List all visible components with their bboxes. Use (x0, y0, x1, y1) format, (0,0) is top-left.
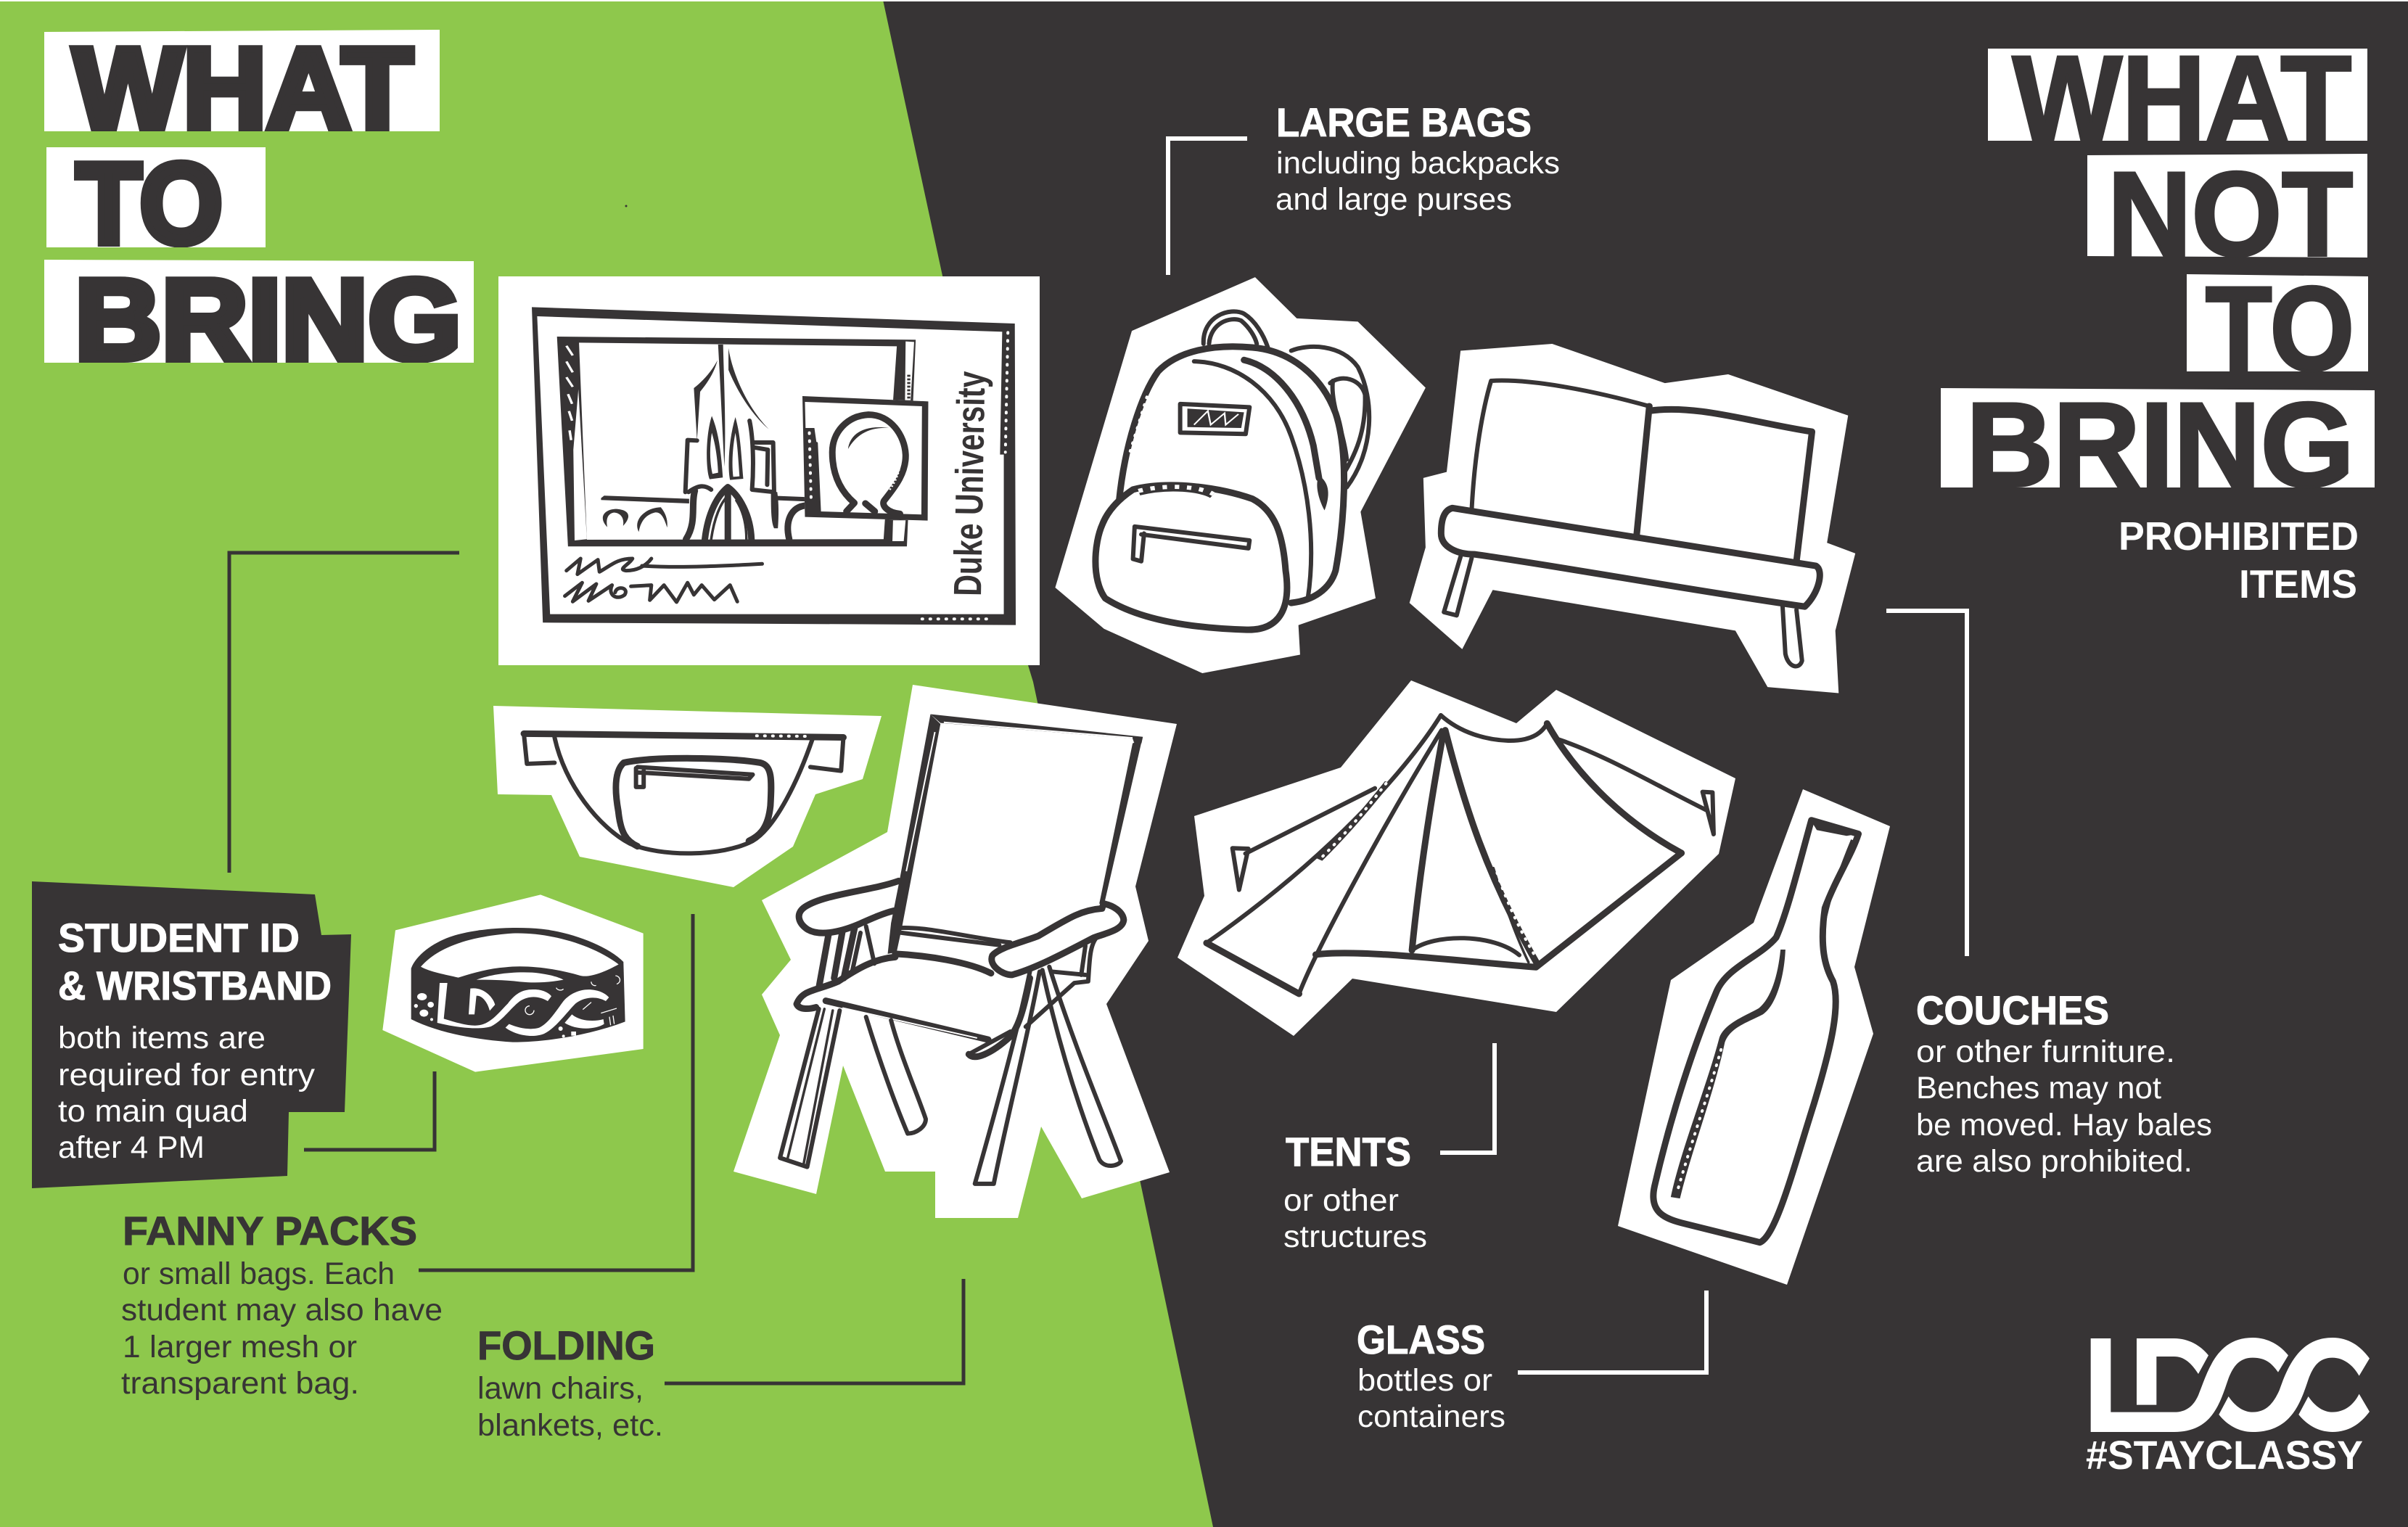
title: what to bring: WHAT (73, 25, 413, 152)
illustration: wristband (382, 894, 644, 1072)
label: tents (1283, 1129, 1427, 1254)
illustration: tent (1178, 680, 1735, 1036)
label: glass: containers (1357, 1399, 1505, 1434)
subtitle: prohibited items (2119, 514, 2359, 606)
title: what to bring: BRING (75, 256, 461, 384)
label: large bags: and large purses (1275, 182, 1512, 217)
label: fanny packs: 1 larger mesh or (123, 1330, 357, 1365)
connector: large bags (1168, 139, 1247, 275)
illustration: folding chair (734, 685, 1177, 1218)
top edge strip (0, 0, 2408, 1)
stray speck (625, 205, 627, 207)
label: fanny packs: FANNY PACKS (123, 1208, 417, 1254)
label: fanny packs: transparent bag. (121, 1366, 359, 1401)
label: tents: or other (1283, 1183, 1399, 1218)
title: what not to bring: BRING (1966, 378, 2354, 511)
callout: student id and wristband: after 4 PM (58, 1130, 205, 1165)
label: couches (1916, 987, 2212, 1179)
connector: folding (665, 1279, 963, 1383)
subtitle: prohibited items: PROHIBITED (2119, 514, 2359, 559)
label: glass: bottles or (1357, 1363, 1492, 1398)
label: couches: be moved. Hay bales (1916, 1108, 2212, 1143)
label: couches: are also prohibited. (1916, 1144, 2193, 1179)
illustration: fanny pack (493, 706, 882, 887)
label: folding: lawn chairs, (477, 1371, 644, 1406)
connector: tents (1440, 1043, 1495, 1153)
connector: student id (229, 553, 459, 873)
callout: student id and wristband: to main quad (58, 1094, 248, 1129)
label: fanny packs: student may also have (121, 1293, 443, 1328)
title: what to bring (44, 25, 474, 384)
connector: glass (1518, 1291, 1706, 1372)
label: couches: or other furniture. (1916, 1034, 2175, 1069)
label: large bags (1275, 99, 1560, 217)
callout: student id and wristband: both items are (58, 1021, 266, 1055)
label: glass (1357, 1317, 1505, 1434)
label: folding (477, 1322, 663, 1443)
callout: student id and wristband: STUDENT ID (58, 915, 300, 960)
callout: student id and wristband (32, 881, 351, 1188)
label: fanny packs (121, 1208, 443, 1401)
label: couches: COUCHES (1916, 987, 2109, 1033)
title: what not to bring: TO (2206, 262, 2354, 395)
label: couches: Benches may not (1916, 1071, 2161, 1106)
label: tents: structures (1283, 1219, 1427, 1254)
illustration: backpack (1055, 277, 1426, 673)
illustration: student id card (498, 276, 1040, 665)
label: large bags: including backpacks (1276, 146, 1560, 181)
title: what not to bring: WHAT (2013, 31, 2351, 165)
illustration: student id card: Duke University (946, 371, 993, 596)
label: folding: blankets, etc. (477, 1408, 663, 1443)
connector: wristband (304, 1071, 435, 1150)
label: fanny packs: or small bags. Each (123, 1256, 395, 1291)
subtitle: prohibited items: ITEMS (2239, 561, 2357, 606)
logo: LDOC stayclassy: #STAYCLASSY (2086, 1432, 2363, 1478)
background: green panel (0, 0, 1213, 1527)
callout: student id and wristband: required for entry (58, 1058, 316, 1092)
title: what to bring: TO (76, 140, 223, 268)
logo: LDOC stayclassy (2086, 1338, 2370, 1478)
connector: couches (1886, 611, 1967, 956)
illustration: couch (1410, 344, 1855, 693)
label: folding: FOLDING (477, 1322, 655, 1368)
illustration: glass bottle (1618, 789, 1890, 1285)
label: tents: TENTS (1286, 1129, 1411, 1174)
callout: student id and wristband: & WRISTBAND (58, 963, 332, 1008)
title: what not to bring (1941, 31, 2375, 511)
label: glass: GLASS (1357, 1317, 1485, 1362)
title: what not to bring: NOT (2108, 147, 2353, 281)
label: large bags: LARGE BAGS (1276, 99, 1532, 145)
connector: fanny packs (419, 914, 693, 1270)
